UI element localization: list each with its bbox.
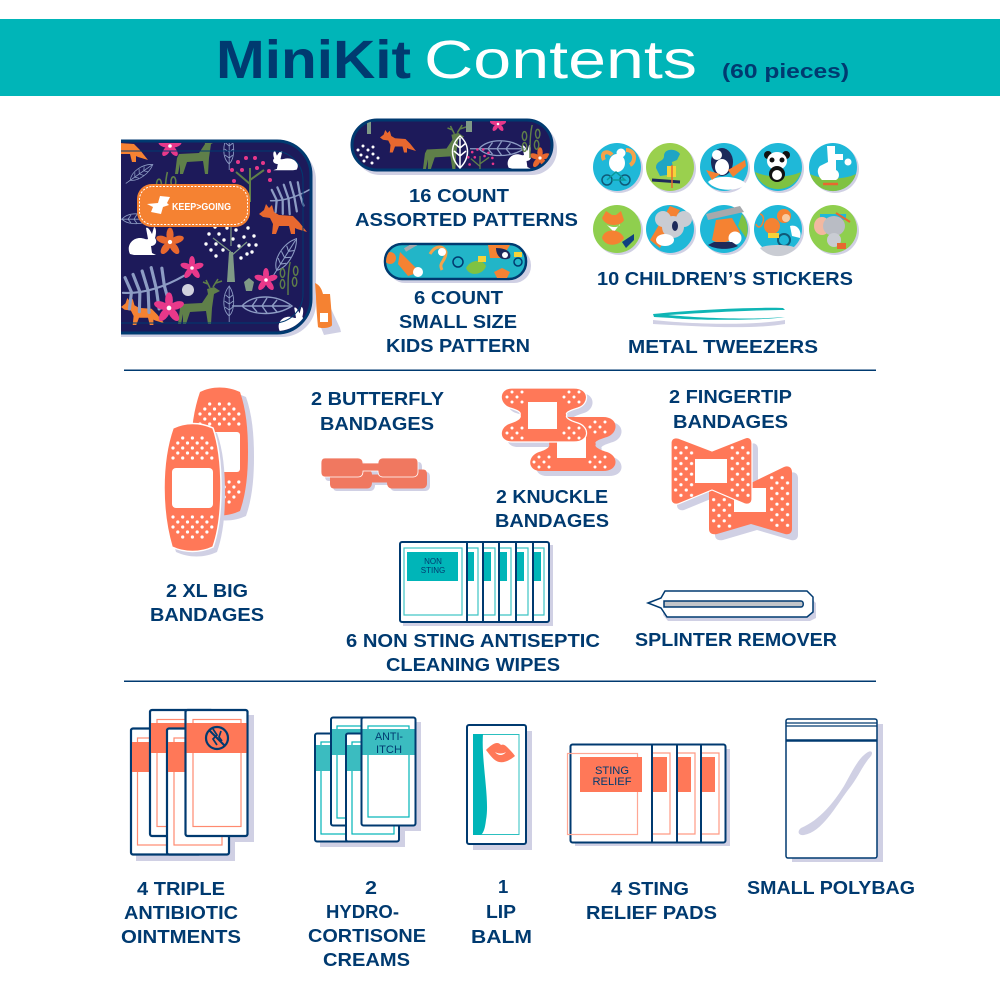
packet 1 <box>315 734 375 842</box>
packet 4: ITCH <box>376 744 402 756</box>
butterfly bandages <box>321 458 430 491</box>
sticker: llama <box>809 143 859 193</box>
label: wipes: 6 NON STING ANTISEPTIC <box>346 630 600 651</box>
label: creams: 2 <box>365 877 377 898</box>
sticker: elephant <box>809 205 859 255</box>
sticker: penguin <box>700 143 750 193</box>
label: ointments: ANTIBIOTIC <box>124 902 238 923</box>
label: ointments: OINTMENTS <box>121 926 241 947</box>
label: butterfly <box>311 388 445 434</box>
sting relief pads <box>568 744 730 846</box>
pouch illustration <box>121 140 341 337</box>
sticker: fox <box>593 205 643 255</box>
label: creams: CREAMS <box>323 949 410 970</box>
kids pattern bandage <box>384 240 531 283</box>
packet 3 <box>167 728 229 854</box>
title: Contents: Contents <box>424 30 697 90</box>
sting relief pads: RELIEF <box>592 776 632 788</box>
zipper pull <box>315 283 341 335</box>
label: fingertip: 2 FINGERTIP <box>669 386 792 407</box>
label: butterfly: BANDAGES <box>320 413 434 434</box>
packet 2 <box>150 710 213 836</box>
sticker: koala <box>646 205 696 255</box>
label: creams: HYDRO- <box>326 901 399 922</box>
back bandage <box>191 388 254 520</box>
label: fingertip <box>669 386 792 432</box>
label: creams <box>308 877 426 970</box>
icon: no germs <box>206 727 228 749</box>
small polybag <box>786 719 883 862</box>
antiseptic wipes: STING <box>421 566 445 575</box>
fingertip bandages <box>671 437 798 540</box>
antiseptic wipes <box>400 541 553 626</box>
header banner <box>0 19 1000 96</box>
label: ointments: 4 TRIPLE <box>137 878 225 899</box>
packet 1 <box>131 728 201 854</box>
hydrocortisone creams <box>315 718 421 847</box>
label: kids pattern <box>386 287 530 356</box>
sticker: panda <box>754 143 804 193</box>
brand label: KEEP>GOING <box>172 202 231 213</box>
label: assorted patterns: ASSORTED PATTERNS <box>355 209 578 230</box>
label: assorted patterns: 16 COUNT <box>409 185 510 206</box>
packet 2 <box>331 718 385 826</box>
label: sting relief: 4 STING <box>611 878 689 899</box>
label: sting relief: RELIEF PADS <box>586 902 717 923</box>
sticker: monkey <box>754 205 804 256</box>
label: lip balm: 1 <box>498 876 508 897</box>
front bandage <box>164 424 225 556</box>
antiseptic wipes: NON <box>424 557 442 566</box>
antibiotic ointments <box>131 710 254 861</box>
label: knuckle <box>495 486 609 531</box>
sticker: dinosaur <box>646 143 696 193</box>
label: xl big <box>150 580 264 625</box>
splinter remover <box>648 591 816 621</box>
brand label <box>137 184 250 227</box>
knuckle bandages <box>501 388 622 476</box>
label: ointments <box>121 878 241 947</box>
label: xl big: 2 XL BIG <box>166 580 248 601</box>
packet 4 <box>362 718 416 826</box>
label: xl big: BANDAGES <box>150 604 264 625</box>
packet 4: ANTI- <box>375 731 403 743</box>
label: knuckle: BANDAGES <box>495 510 609 531</box>
label: wipes <box>346 630 600 675</box>
sticker: sloth <box>700 205 750 255</box>
bag highlight <box>799 751 872 835</box>
label: stickers: 10 CHILDREN’S STICKERS <box>597 268 853 289</box>
back knuckle bandage <box>530 417 616 471</box>
packet 4 <box>186 710 248 836</box>
label: sting relief <box>586 878 717 923</box>
label: fingertip: BANDAGES <box>673 411 788 432</box>
front knuckle bandage <box>501 388 587 442</box>
label: creams: CORTISONE <box>308 925 426 946</box>
divider <box>124 680 876 682</box>
icon: lips <box>486 743 515 762</box>
tweezers <box>653 308 785 327</box>
divider <box>124 370 876 371</box>
label: knuckle: 2 KNUCKLE <box>496 486 608 507</box>
label: kids pattern: KIDS PATTERN <box>386 335 530 356</box>
label: lip balm: LIP <box>486 901 516 922</box>
label: kids pattern: 6 COUNT <box>414 287 504 308</box>
label: polybag: SMALL POLYBAG <box>747 877 915 898</box>
label: lip balm <box>471 876 532 947</box>
label: butterfly: 2 BUTTERFLY <box>311 388 445 409</box>
sting relief pads: STING <box>595 765 629 777</box>
title: MiniKit: MiniKit <box>216 30 411 90</box>
lip balm <box>467 725 532 850</box>
stickers <box>593 143 859 256</box>
label: kids pattern: SMALL SIZE <box>399 311 517 332</box>
label: wipes: CLEANING WIPES <box>386 654 560 675</box>
XL bandages <box>164 388 254 556</box>
piece count: (60 pieces) <box>722 61 849 83</box>
label: lip balm: BALM <box>471 926 532 947</box>
label: splinter: SPLINTER REMOVER <box>635 629 837 650</box>
assorted pattern bandage <box>352 116 557 178</box>
label: assorted patterns <box>355 185 578 230</box>
sticker: unicorn <box>593 143 643 193</box>
label: tweezers: METAL TWEEZERS <box>628 336 818 357</box>
packet 3 <box>346 734 399 842</box>
